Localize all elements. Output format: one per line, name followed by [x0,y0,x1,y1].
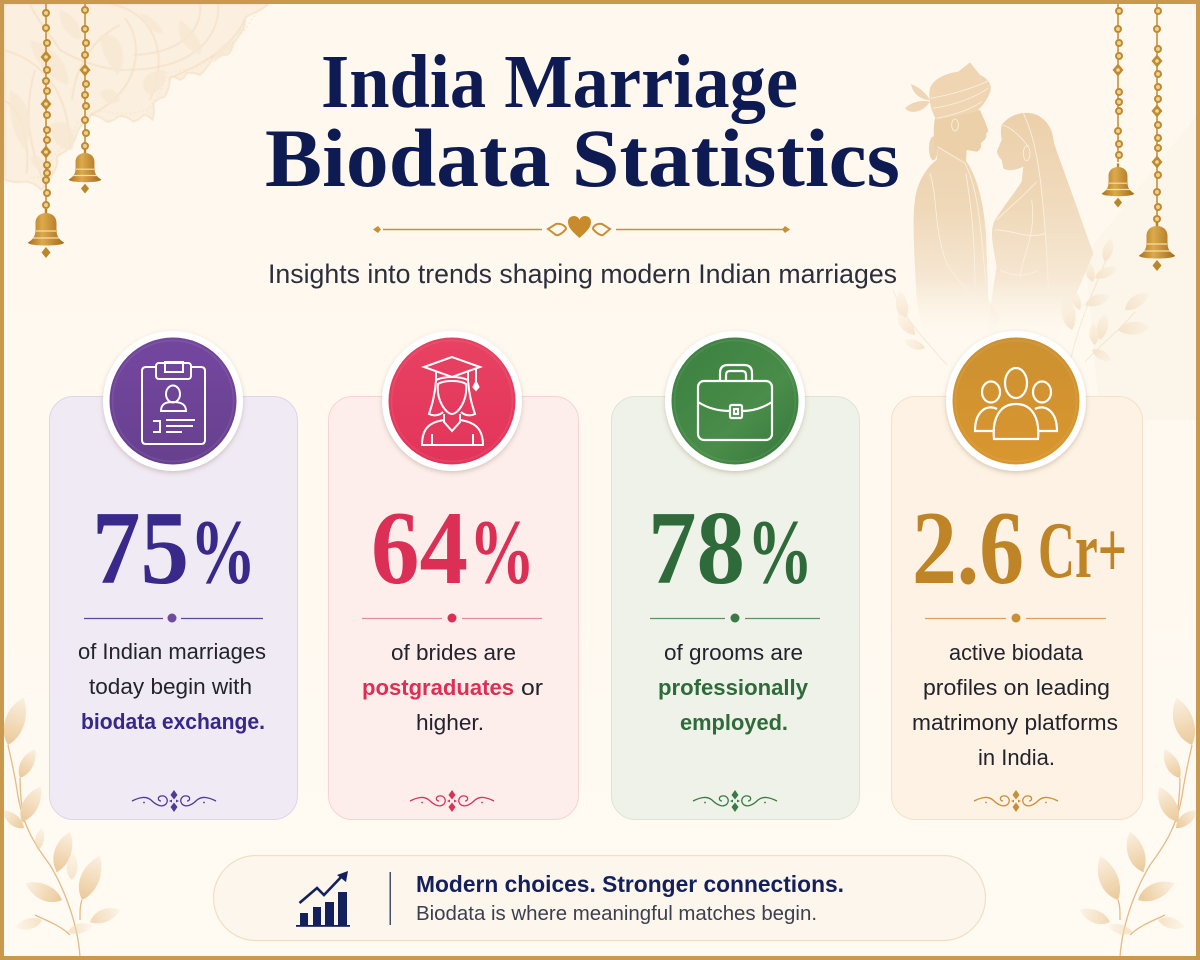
icon: growth chart [296,871,350,927]
leaves behind couple [893,236,1153,365]
stat: 75%: % [190,501,256,603]
stat: 64%: % [469,501,535,603]
description text: profiles on leading [923,675,1110,700]
stat: 78%: 78 [648,489,745,606]
icon: clipboard profile [103,331,243,471]
footer callout pill [214,856,986,940]
bride [987,113,1093,337]
leaf branch bottom right [1077,695,1200,957]
stat: 2.6 Cr+ [912,489,1127,606]
description text: today begin with [89,674,252,699]
leaf branch bottom left [0,694,122,957]
title [265,40,900,204]
couple silhouette with leaves [893,62,1153,365]
divider with dot [362,614,542,622]
stat: 64% [371,489,535,606]
vertical rule [390,872,391,925]
description text [362,640,543,735]
ornament [974,790,1058,812]
description text [658,640,809,735]
right long chain with bell [1139,8,1175,271]
right short chain with bell [1102,4,1157,222]
description text [78,639,266,734]
stat: 2.6 Cr+: Cr+ [1038,507,1127,595]
panel: 2.6 crore profiles [892,331,1142,820]
description text: or [521,675,543,700]
hanging bells top right [1102,4,1175,271]
callout subline: Biodata is where meaningful matches begin. [416,903,817,925]
stat: 75%: 75 [92,489,189,606]
groom [905,62,1000,343]
description text: matrimony platforms [912,710,1118,735]
panel: 78 percent employed [612,331,860,820]
description text: in India. [978,745,1055,770]
divider with dot [650,614,820,622]
ornament [132,790,216,812]
background tint top right [1085,115,1197,420]
couple figures [905,62,1093,343]
subtitle: Insights into trends shaping modern Indian marriages [268,259,897,289]
description text: higher. [416,710,484,735]
icon: people group [946,331,1086,471]
title: Biodata Statistics [265,112,900,204]
panel: 75 percent biodata exchange [50,331,298,820]
stat: 78%: % [747,501,813,603]
divider with dot [925,614,1106,622]
ornament [410,790,494,812]
title: India Marriage [321,40,798,124]
description text: of grooms are [664,640,803,665]
stat: 2.6 Cr+: 2.6 [912,489,1024,606]
ornament [693,790,777,812]
description text: active biodata [949,640,1084,665]
stat: 78% [648,489,813,606]
icon: graduate woman [382,331,522,471]
description text: of brides are [391,640,516,665]
mandala corner ornament [4,4,268,190]
description text: biodata exchange. [81,709,265,734]
description text: of Indian marriages [78,639,266,664]
description text [912,640,1118,770]
description text: postgraduates [362,675,514,700]
callout headline: Modern choices. Stronger connections. [416,871,844,897]
stat: 64%: 64 [371,489,468,606]
left long chain with bell [28,4,85,258]
icon: briefcase [665,331,805,471]
heart divider [373,216,790,238]
panel: 64 percent postgraduates [328,331,578,820]
description text: employed. [680,710,788,735]
divider with dot [84,614,263,622]
stat: 75% [92,489,256,606]
description text: professionally [658,675,809,700]
left short chain with bell [69,7,101,194]
hanging bells top left [28,4,101,258]
